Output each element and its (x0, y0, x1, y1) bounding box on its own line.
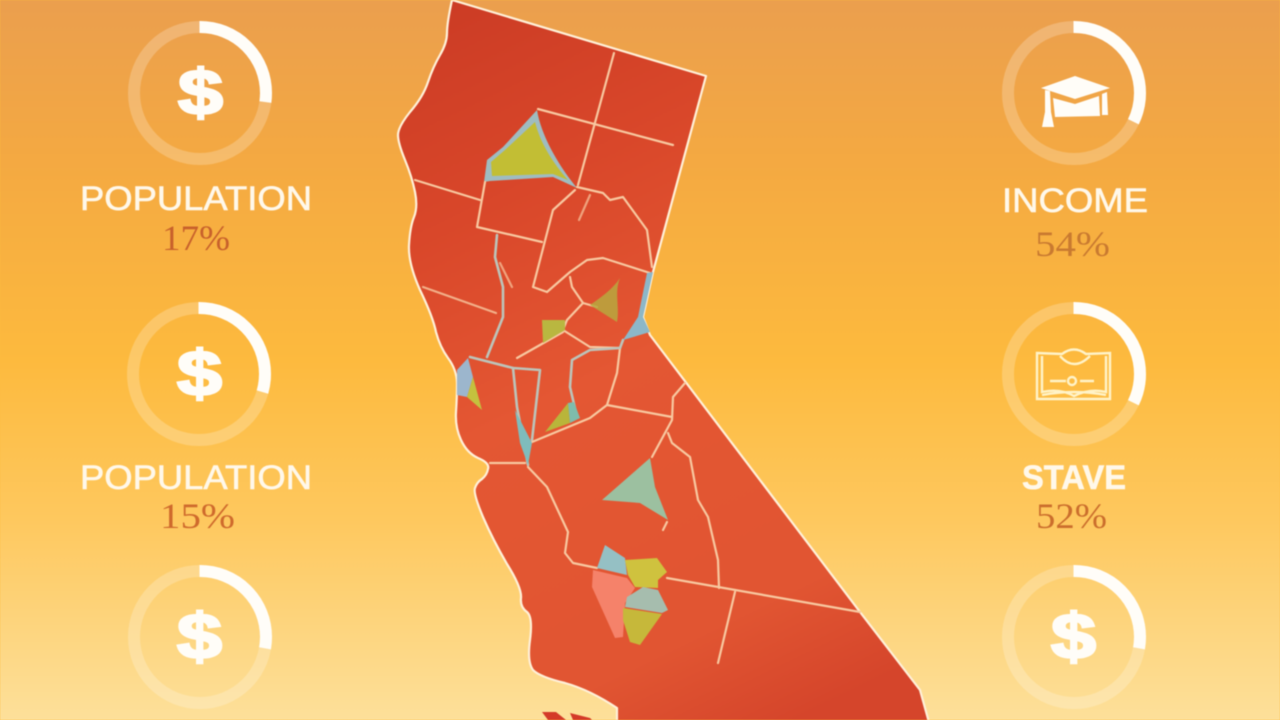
panel: population 15% (80, 308, 312, 536)
panel: income 54% (1002, 27, 1148, 264)
label: POPULATION (80, 459, 312, 497)
icon: graduation cap (1041, 76, 1110, 127)
ring gauge (134, 571, 266, 703)
icon: dollar sign: $ (177, 600, 222, 672)
interior olive triangle (590, 278, 620, 322)
county boundary lines (415, 53, 860, 663)
panel: bottom right ring (1008, 571, 1140, 703)
ring gauge (134, 27, 266, 159)
map of California (398, 0, 930, 720)
icon: dollar sign: $ (178, 56, 223, 128)
panel: bottom left ring (134, 571, 266, 703)
ring gauge (1008, 27, 1140, 159)
icon: dollar sign: $ (177, 337, 222, 409)
label: STAVE (1022, 459, 1126, 497)
state outline (398, 0, 930, 720)
label: POPULATION (80, 180, 312, 218)
southern cluster of coloured shapes (592, 545, 668, 645)
value: 15% (160, 496, 235, 536)
panel: population 17% (80, 27, 312, 258)
island fragments at bottom (542, 712, 592, 720)
label: INCOME (1002, 182, 1148, 220)
icon: dollar sign: $ (1051, 600, 1096, 672)
central olive triangle (545, 402, 580, 432)
small olive patch (542, 320, 565, 343)
north region shape (484, 110, 577, 188)
teal triangle (602, 458, 668, 520)
value: 54% (1035, 224, 1110, 264)
ring gauge (133, 308, 265, 440)
ring gauge (1008, 308, 1140, 440)
east lake strip (623, 272, 653, 340)
coast bay shape (457, 358, 482, 410)
central teal sliver (515, 410, 532, 465)
value: 17% (162, 218, 230, 258)
ring gauge (1008, 571, 1140, 703)
icon: open book of money (1037, 350, 1110, 399)
value: 52% (1036, 496, 1107, 536)
panel: stave 52% (1008, 308, 1140, 536)
